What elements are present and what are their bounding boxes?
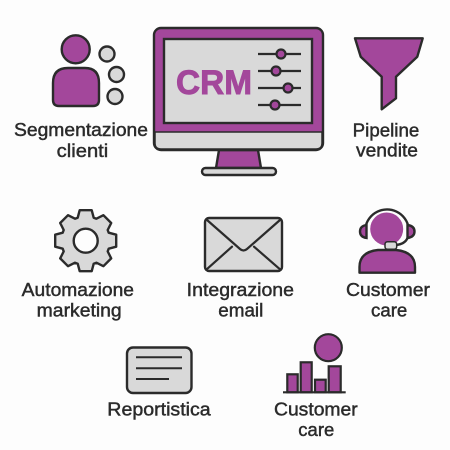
- monitor chin: [155, 132, 322, 149]
- icon: envelope: [205, 218, 282, 271]
- ear cups: [360, 225, 414, 238]
- CRM wordmark: CRM: [176, 64, 252, 102]
- icon: headset agent: [360, 209, 415, 273]
- sliders: [258, 50, 301, 110]
- label: Customer care (chart): [274, 399, 358, 440]
- label: Automazione marketing: Automazione: [22, 279, 134, 300]
- label: Pipeline vendite: Pipeline: [353, 120, 419, 141]
- headband: [365, 209, 409, 238]
- label: Segmentazione clienti: clienti: [57, 140, 108, 161]
- icon: gear: [55, 210, 116, 271]
- agent body: [360, 250, 415, 273]
- icon: sales funnel: [355, 38, 423, 109]
- monitor body: [154, 28, 323, 150]
- icon: report card: [127, 348, 192, 393]
- label: Customer care: care: [371, 300, 407, 321]
- label: Automazione marketing: marketing: [37, 300, 122, 321]
- icon: bar chart with circle: [283, 334, 346, 392]
- label: Reportistica: Reportistica: [107, 399, 211, 420]
- label: Pipeline vendite: vendite: [356, 140, 418, 161]
- label: Pipeline vendite: [353, 120, 419, 161]
- monitor screen: [164, 39, 312, 123]
- monitor base: [202, 168, 276, 175]
- label: Integrazione email: Integrazione: [187, 279, 294, 300]
- microphone boom: [396, 238, 408, 245]
- agent head: [370, 212, 403, 246]
- label: Integrazione email: email: [218, 300, 263, 321]
- label: Integrazione email: [187, 279, 294, 321]
- monitor stand: [216, 150, 261, 168]
- label: Customer care: [346, 279, 430, 321]
- label: Customer care: Customer: [346, 279, 430, 300]
- label: Segmentazione clienti: Segmentazione: [14, 119, 148, 140]
- label: Segmentazione clienti: [14, 119, 148, 161]
- label: Customer care (chart): care: [298, 419, 334, 440]
- icon: CRM monitor: [154, 28, 323, 175]
- microphone: [385, 242, 397, 249]
- label: Automazione marketing: [22, 279, 134, 321]
- label: Customer care (chart): Customer: [274, 399, 358, 420]
- icon: customer segmentation: [53, 35, 124, 106]
